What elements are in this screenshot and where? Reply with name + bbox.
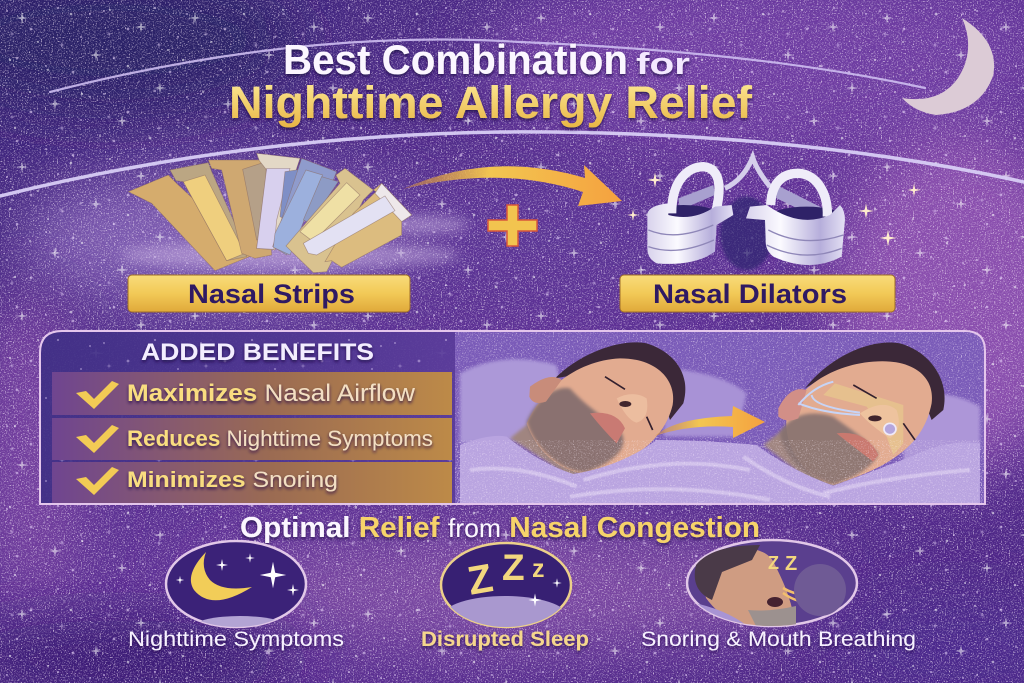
label: snoring and mouth breathing: Snoring & Mouth Breathing [641,628,916,651]
icon: plus sign [488,205,537,246]
label: Nasal Dilators: Nasal Dilators [653,279,847,309]
arrow: strips to dilators [403,165,622,206]
benefit row: maximizes nasal airflow [52,372,452,415]
pillows [460,359,570,443]
heading: added benefits: ADDED BENEFITS [141,339,374,366]
panel: added benefits and sleepers [40,331,985,510]
title: for [636,46,690,81]
icon: disrupted sleep ZZZ circle: z [532,555,544,583]
label: disrupted sleep: Disrupted Sleep [421,628,589,651]
icon: nighttime symptoms moon circle [166,541,306,636]
icon: snoring man circle [687,540,857,635]
icon: snoring man circle: Z [768,553,779,573]
icon: disrupted sleep ZZZ circle: Z [464,556,496,604]
left man [555,342,685,420]
benefit row: maximizes nasal airflow: Maximizes Nasal Airflow [127,380,416,407]
benefit row: reduces nighttime symptoms [52,418,452,460]
heading: optimal relief: Optimal Relief from Nasal Congestion [240,512,760,544]
benefit row: minimizes snoring [52,462,452,503]
right man [805,343,945,420]
label: nighttime symptoms: Nighttime Symptoms [128,628,344,651]
illustration: soft clouds under products [120,216,470,269]
title [229,36,753,128]
benefit row: minimizes snoring: Minimizes Snoring [127,467,338,492]
icon: disrupted sleep ZZZ circle: Z [502,547,525,588]
sparkles around dilators [627,172,921,246]
arrow: before to after [655,406,765,438]
decorative arcs framing the title [0,39,1024,196]
icon: disrupted sleep ZZZ circle [441,543,571,636]
neck [509,423,580,474]
illustration: fan of nasal strips [128,153,412,273]
label: Nasal Strips: Nasal Strips [188,279,355,309]
icon: crescent moon [902,18,994,115]
panel border [40,331,985,504]
label: Nasal Dilators [620,275,895,312]
illustration: sleeping men before and after [455,332,985,510]
icon: snoring man circle: Z [785,553,797,575]
title: Best Combination [283,36,628,83]
benefit row: reduces nighttime symptoms: Reduces Nighttime Symptoms [127,426,433,451]
title: Nighttime Allergy Relief [229,77,753,128]
label: Nasal Strips [128,275,410,312]
blankets [460,436,980,510]
illustration: nasal dilators [647,157,845,270]
